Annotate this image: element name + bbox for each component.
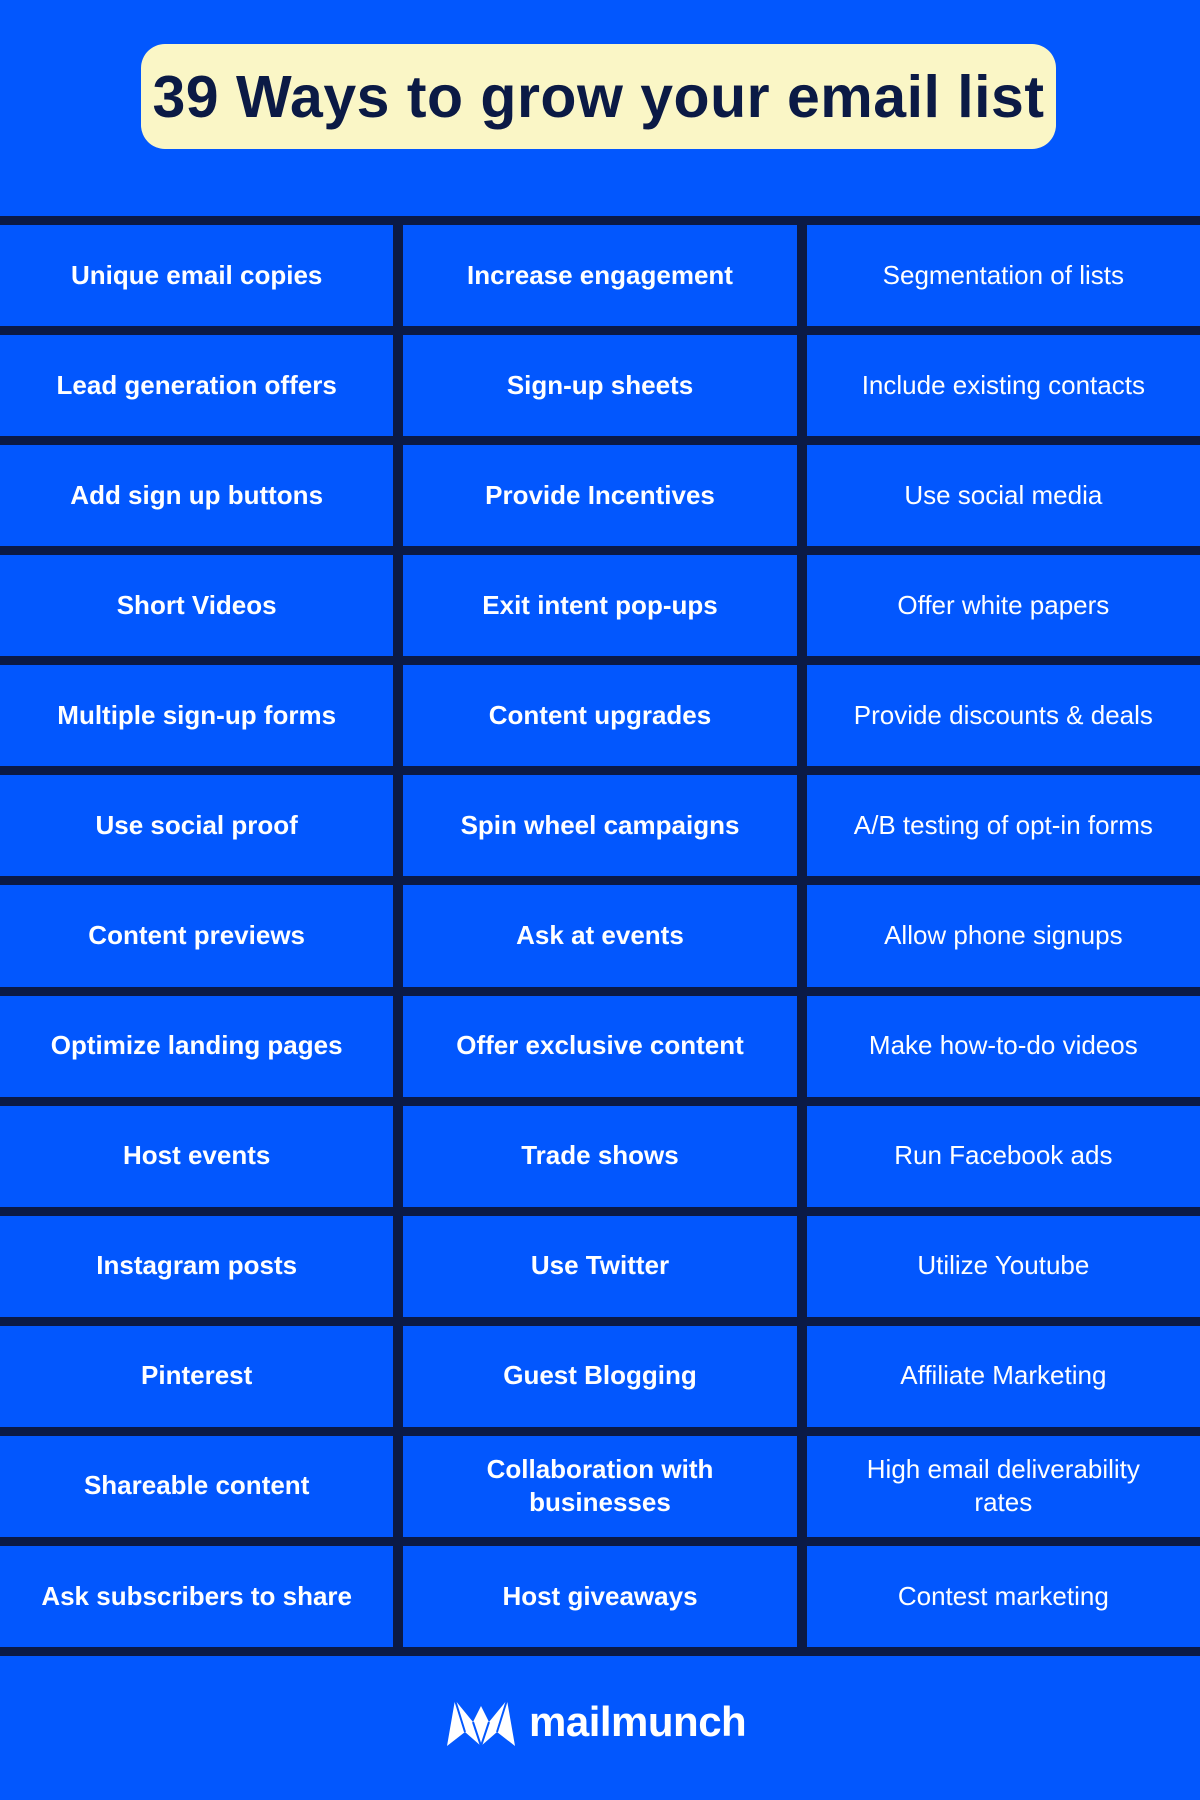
cell: Contest marketing — [898, 1581, 1109, 1611]
cell — [807, 445, 1200, 546]
cell — [403, 665, 797, 766]
cell: Short Videos — [117, 590, 277, 620]
cell — [807, 996, 1200, 1097]
cell — [807, 555, 1200, 656]
cell — [807, 665, 1200, 766]
cell: Affiliate Marketing — [900, 1360, 1106, 1390]
cell — [403, 225, 797, 326]
cell: Make how-to-do videos — [869, 1030, 1138, 1060]
cell: Multiple sign-up forms — [57, 700, 336, 730]
cell — [403, 445, 797, 546]
cell — [403, 1546, 797, 1647]
cell — [403, 1106, 797, 1207]
cell — [0, 775, 393, 876]
grid of 39 ways — [0, 216, 1200, 1656]
cell: Segmentation of lists — [883, 260, 1124, 290]
cell — [807, 1106, 1200, 1207]
cell: Shareable content — [84, 1470, 309, 1500]
cell — [403, 555, 797, 656]
cell: Provide Incentives — [485, 480, 715, 510]
cell: Collaboration with — [487, 1454, 713, 1484]
cell: Offer white papers — [897, 590, 1109, 620]
cell: Provide discounts & deals — [854, 700, 1153, 730]
cell: Run Facebook ads — [894, 1140, 1112, 1170]
cell — [807, 1216, 1200, 1317]
cell — [0, 885, 393, 987]
cell — [0, 335, 393, 436]
cell: Add sign up buttons — [70, 480, 323, 510]
cell: Use Twitter — [531, 1250, 669, 1280]
cell: Lead generation offers — [57, 370, 337, 400]
cell: Sign-up sheets — [507, 370, 693, 400]
cell: rates — [974, 1487, 1032, 1517]
cell — [807, 1546, 1200, 1647]
cell: businesses — [529, 1487, 671, 1517]
cell — [0, 225, 393, 326]
cell — [807, 225, 1200, 326]
icon: mailmunch mark — [447, 1702, 515, 1746]
cell: Spin wheel campaigns — [461, 810, 739, 840]
cell: Unique email copies — [71, 260, 322, 290]
cell: Optimize landing pages — [51, 1030, 343, 1060]
cell — [403, 1326, 797, 1427]
cell: Allow phone signups — [884, 920, 1123, 950]
title — [141, 44, 1056, 149]
cell — [403, 996, 797, 1097]
cell: High email deliverability — [867, 1454, 1140, 1484]
cell: Offer exclusive content — [456, 1030, 744, 1060]
cell: Instagram posts — [96, 1250, 297, 1280]
cell: Trade shows — [521, 1140, 679, 1170]
cell: Utilize Youtube — [917, 1250, 1089, 1280]
cell: Host events — [123, 1140, 270, 1170]
cell: Ask at events — [516, 920, 684, 950]
cell — [403, 775, 797, 876]
cell — [807, 1436, 1200, 1537]
logo: mailmunch: mailmunch — [529, 1698, 746, 1745]
cell — [403, 1216, 797, 1317]
cell — [0, 1436, 393, 1537]
cell: Use social media — [904, 480, 1102, 510]
cell: Host giveaways — [502, 1581, 698, 1611]
cell: Content upgrades — [489, 700, 711, 730]
cell — [403, 335, 797, 436]
cell — [0, 665, 393, 766]
cell: Ask subscribers to share — [41, 1581, 352, 1611]
cell: A/B testing of opt-in forms — [854, 810, 1153, 840]
cell: Content previews — [88, 920, 305, 950]
cell — [403, 885, 797, 987]
cell — [0, 555, 393, 656]
title: 39 Ways to grow your email list — [152, 64, 1044, 130]
cell — [0, 996, 393, 1097]
cell: Include existing contacts — [862, 370, 1145, 400]
cell — [403, 1436, 797, 1537]
cell — [807, 885, 1200, 987]
cell: Guest Blogging — [503, 1360, 697, 1390]
cell — [0, 1106, 393, 1207]
cell: Exit intent pop-ups — [482, 590, 718, 620]
cell: Use social proof — [96, 810, 298, 840]
cell — [0, 1216, 393, 1317]
cell — [0, 1546, 393, 1647]
cell: Pinterest — [141, 1360, 252, 1390]
cell — [0, 445, 393, 546]
cell — [807, 775, 1200, 876]
cell — [807, 1326, 1200, 1427]
cell — [807, 335, 1200, 436]
cell: Increase engagement — [467, 260, 733, 290]
cell — [0, 1326, 393, 1427]
